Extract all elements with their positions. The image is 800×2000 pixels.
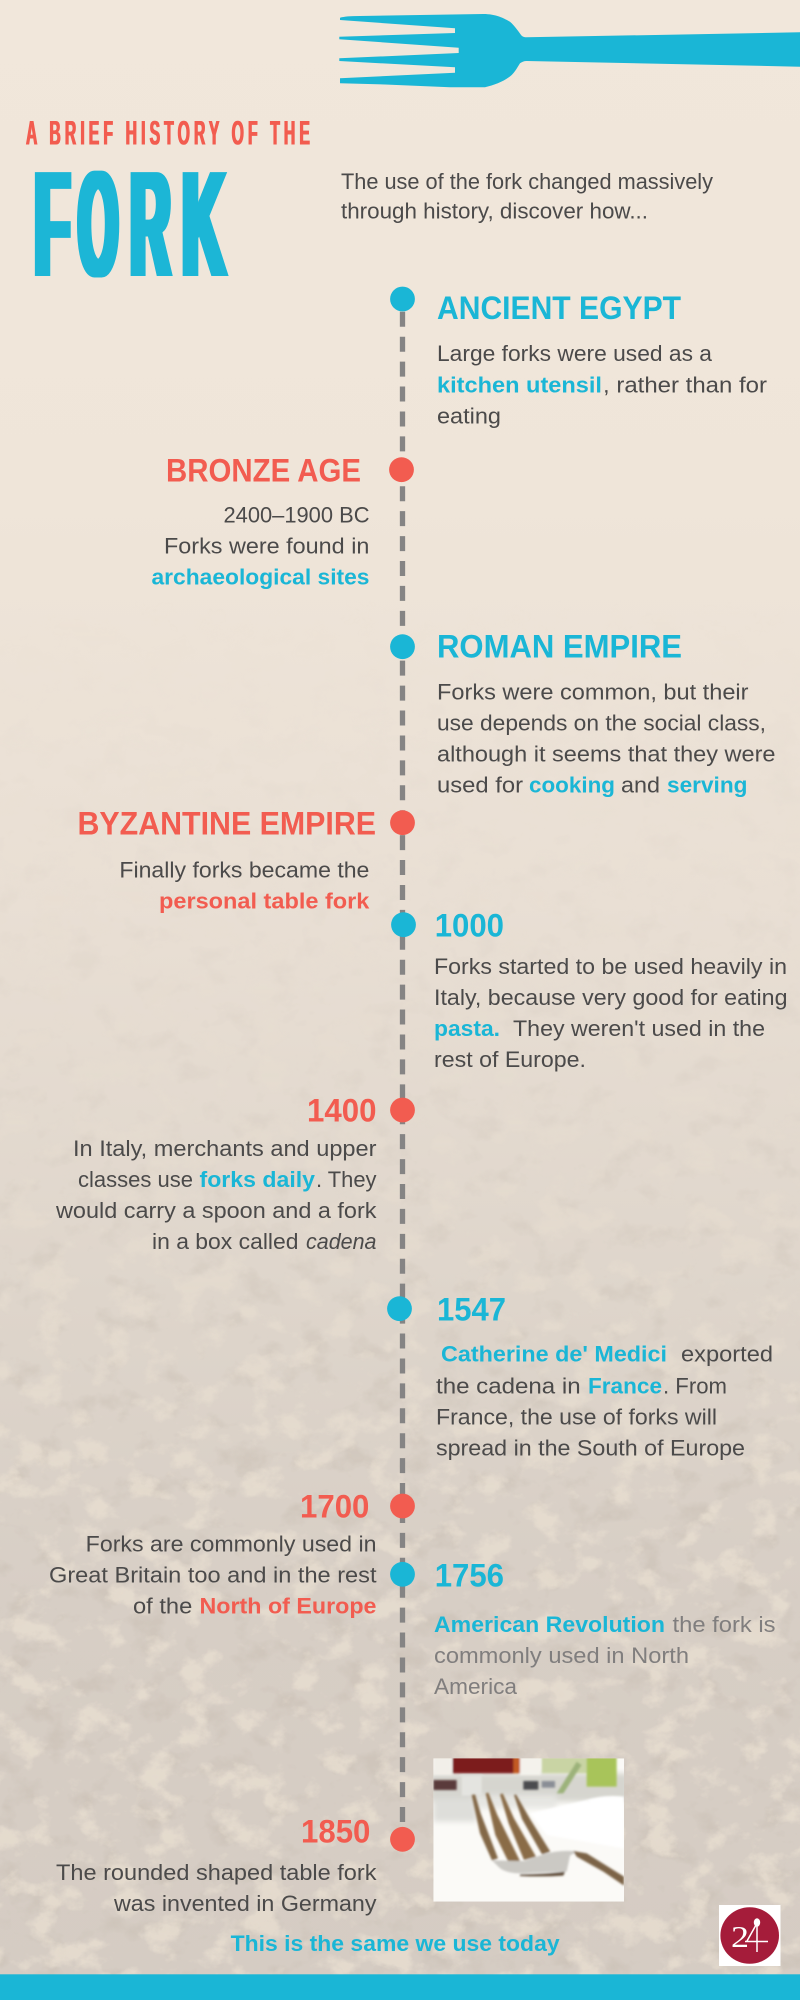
body: used for (437, 772, 523, 797)
body: rest of Europe. (434, 1047, 586, 1072)
event: byzantine empire (78, 805, 415, 914)
body: , rather than for (603, 372, 767, 398)
body: exported (681, 1342, 773, 1367)
event: bronze age (152, 453, 414, 589)
marker (390, 634, 415, 659)
bottom bar (0, 1974, 800, 2000)
marker (390, 1562, 415, 1587)
body: Finally forks became the (119, 858, 369, 883)
body: eating (437, 404, 501, 428)
body: kitchen utensil (437, 372, 602, 398)
body: France (588, 1373, 662, 1398)
background texture (0, 712, 800, 1974)
body: They weren't used in the (513, 1016, 765, 1041)
marker (391, 912, 416, 937)
event: 1000 (391, 908, 788, 1072)
heading: 1547 (437, 1292, 506, 1328)
body (119, 858, 370, 914)
body: archaeological sites (152, 564, 370, 589)
marker (390, 810, 415, 835)
body: the cadena in (436, 1373, 581, 1398)
icon: fork (339, 14, 800, 87)
intro text: The use of the fork changed massively (341, 169, 713, 194)
body: France, the use of forks will (436, 1404, 717, 1429)
marker (390, 1494, 415, 1518)
marker (390, 1827, 415, 1852)
body (434, 1612, 776, 1699)
event: ancient egypt (390, 287, 767, 428)
body: Forks are commonly used in (86, 1531, 376, 1556)
body (434, 954, 788, 1072)
body: . From (663, 1373, 727, 1398)
marker (387, 1296, 412, 1321)
closing note: This is the same we use today (231, 1931, 560, 1956)
heading: ANCIENT EGYPT (437, 290, 681, 326)
heading: 1700 (300, 1488, 369, 1524)
body: Great Britain too and in the rest (49, 1562, 376, 1587)
event: 1400 (55, 1093, 415, 1254)
heading: BRONZE AGE (166, 453, 361, 489)
logo (719, 1905, 780, 1966)
text: A BRIEF HISTORY OF THE (26, 114, 314, 152)
body: classes use (78, 1167, 193, 1192)
body: use depends on the social class, (437, 710, 766, 735)
body: America (434, 1674, 518, 1699)
body: of the (133, 1593, 192, 1618)
heading: 1400 (307, 1093, 376, 1129)
event: roman empire (390, 629, 776, 797)
body: commonly used in North (434, 1643, 689, 1668)
body (437, 341, 767, 428)
body: and (621, 772, 660, 797)
event: 1756 (390, 1558, 776, 1699)
event: 1547 (387, 1292, 773, 1460)
body (56, 1860, 378, 1916)
heading: 1000 (435, 908, 504, 944)
event: 1700 (49, 1488, 415, 1618)
body: pasta. (434, 1016, 500, 1041)
event: 1850 (56, 1813, 415, 1916)
body: Italy, because very good for eating (434, 985, 788, 1010)
marker (389, 457, 414, 482)
body: The rounded shaped table fork (56, 1860, 378, 1885)
body (436, 1342, 773, 1460)
heading: 1756 (435, 1558, 504, 1594)
body: North of Europe (200, 1593, 376, 1618)
body: although it seems that they were (437, 741, 776, 766)
body: Forks were common, but their (437, 679, 748, 704)
intro text (341, 169, 713, 224)
body: personal table fork (159, 889, 370, 914)
body (49, 1531, 376, 1618)
intro text: through history, discover how... (341, 198, 648, 224)
logo numerals and spoon: 2 (731, 1919, 749, 1954)
photo: fork on tablecloth (430, 1757, 630, 1902)
fork handle (573, 1851, 624, 1886)
marker (390, 1098, 415, 1122)
body: . They (316, 1167, 376, 1192)
body: Forks started to be used heavily in (434, 954, 787, 979)
timeline dashed line (400, 312, 405, 1822)
heading: ROMAN EMPIRE (437, 629, 682, 665)
text: K (182, 139, 226, 308)
body: spread in the South of Europe (436, 1435, 745, 1460)
body: forks daily (200, 1167, 316, 1192)
body: American Revolution (434, 1612, 665, 1637)
body: cooking (529, 772, 615, 797)
body (437, 679, 776, 797)
body: would carry a spoon and a fork (55, 1198, 378, 1223)
body: the fork is (672, 1612, 776, 1637)
heading: 1850 (301, 1813, 370, 1849)
body: was invented in Germany (113, 1891, 376, 1916)
body: in a box called (152, 1229, 298, 1254)
body: 2400–1900 BC (224, 502, 370, 527)
title: fork (34, 139, 226, 308)
title: fork: O (78, 139, 118, 308)
body: Catherine de' Medici (441, 1342, 667, 1367)
title: fork: R (130, 139, 170, 308)
heading: BYZANTINE EMPIRE (78, 805, 376, 841)
body (55, 1136, 378, 1254)
title: fork: F (34, 139, 70, 308)
body: cadena (306, 1229, 376, 1254)
body: In Italy, merchants and upper (73, 1136, 376, 1161)
body (152, 502, 370, 589)
fork tines (472, 1794, 498, 1860)
marker (390, 287, 415, 311)
fork body (492, 1851, 577, 1873)
body: serving (667, 772, 748, 797)
body: Large forks were used as a (437, 341, 713, 366)
body: Forks were found in (164, 533, 369, 558)
